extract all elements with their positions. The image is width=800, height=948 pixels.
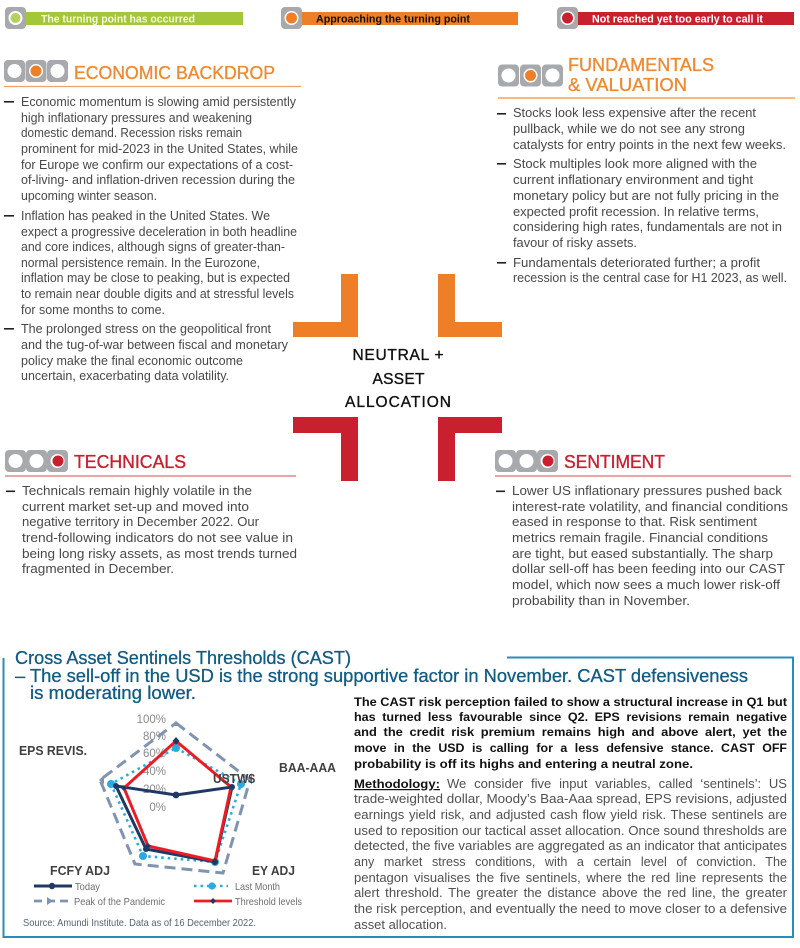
chart legend: Today xyxy=(75,881,101,893)
text block: technicals bullets xyxy=(6,483,297,576)
axis labels: 20% xyxy=(143,784,166,796)
icon: traffic light amber xyxy=(4,60,68,82)
source note: Source: Amundi Institute. Data as of 16 December 2022. xyxy=(23,917,256,929)
text block: fundamentals bullets: Stocks look less expensive after the recent xyxy=(513,105,756,120)
text block: methodology: We consider five input variables, called ‘sentinels’: US xyxy=(447,777,787,791)
text block: economic backdrop bullets: The prolonged stress on the geopolitical front xyxy=(21,322,272,336)
text block: economic backdrop bullets: inflation may be close to peaking, but is expected xyxy=(21,271,290,285)
text block: sentiment bullets: dollar sell-off has been feeding into our CAST xyxy=(512,561,785,576)
text block: technicals bullets: trend-following indicators do not see value in xyxy=(22,530,293,545)
panel: cross asset sentinels thresholds xyxy=(4,647,793,937)
series: last month xyxy=(107,744,245,866)
heading: fundamentals and valuation: FUNDAMENTALS xyxy=(568,55,714,75)
text block: methodology: pentagon visualises the five sentinels, where the red line represents the xyxy=(354,871,787,885)
text block: CAST risk perception: and the credit risk premium remains high and above alert, yet the xyxy=(354,725,787,739)
text block: technicals bullets: fragmented in December. xyxy=(22,561,174,576)
text block: CAST risk perception: The CAST risk perception failed to show a structural increase in Q1 but xyxy=(354,695,787,709)
text block: CAST risk perception: move in the USD is calling for a less defensive stance. CAST OFF xyxy=(354,741,787,755)
text block: methodology xyxy=(354,777,787,932)
axis names: EY ADJ xyxy=(252,863,295,878)
text block: methodology: Methodology: xyxy=(354,777,440,791)
text block: fundamentals bullets: catalysts for entry points in the next few weeks. xyxy=(513,137,786,152)
heading: fundamentals and valuation: & VALUATION xyxy=(568,75,687,95)
legend item: turning point occurred: The turning point has occurred xyxy=(41,14,195,26)
graphic: central corner brackets xyxy=(293,274,502,481)
chart legend: Peak of the Pandemic xyxy=(74,896,165,908)
axis labels: 60% xyxy=(143,748,166,760)
legend item: approaching turning point: Approaching the turning point xyxy=(316,14,470,26)
text block: sentiment bullets: model, which now sees a much lower risk-off xyxy=(512,577,780,592)
text block: methodology: alert threshold. The greater the distance above the red line, the greater xyxy=(354,886,787,900)
axis names: USTW$ xyxy=(213,771,256,786)
text block: economic backdrop bullets: high inflationary pressures and weakening xyxy=(21,111,252,125)
title: neutral + asset allocation xyxy=(345,347,451,411)
radar chart: CAST pentagon xyxy=(19,714,337,878)
text block: sentiment bullets: interest-rate volatility, and financial conditions xyxy=(512,499,789,514)
text block: economic backdrop bullets: for Europe we confirm our expectations of a cost- xyxy=(21,158,293,172)
icon: traffic light red xyxy=(495,450,558,472)
heading: CAST title: – The sell-off in the USD is the strong supportive factor in November. CAST defensiveness xyxy=(15,665,748,686)
text block: methodology: earnings yield risk, and adjusted cash flow yield risk. These sentinels are xyxy=(354,808,787,822)
text block: methodology: asset allocation. xyxy=(354,918,447,932)
heading: CAST title: is moderating lower. xyxy=(30,682,196,703)
text block: sentiment bullets: Lower US inflationary pressures pushed back xyxy=(512,483,783,498)
text block: economic backdrop bullets: upcoming winter season. xyxy=(21,189,157,203)
legend item: not reached yet xyxy=(557,7,794,29)
axis names: EPS REVIS. xyxy=(19,743,87,758)
icon: traffic light red xyxy=(5,450,68,472)
text block: CAST risk perception xyxy=(354,695,787,771)
text block: economic backdrop bullets xyxy=(4,95,298,383)
text block: fundamentals bullets: current inflationary environment and tight xyxy=(513,172,753,187)
text block: economic backdrop bullets: to remain near double digits and at stressful levels xyxy=(21,287,294,301)
text block: technicals bullets: current market set-up and moved into xyxy=(22,499,249,514)
text block: methodology: detected, the five variables are aggregated as an indicator that anticipates xyxy=(354,839,787,853)
text block: economic backdrop bullets: of-living- and inflation-driven recession during the xyxy=(21,173,295,187)
text block: sentiment bullets: eased in response to that. Risk sentiment xyxy=(512,514,757,529)
chart legend xyxy=(34,881,302,908)
text block: economic backdrop bullets: prominent for mid-2023 in the United States, while xyxy=(21,142,298,156)
text block: CAST risk perception: probability is off its highs and entering a neutral zone. xyxy=(354,757,693,771)
heading: technicals: TECHNICALS xyxy=(74,452,186,472)
legend item: turning point occurred xyxy=(5,7,243,29)
text block: technicals bullets: negative territory in December 2022. Our xyxy=(22,514,260,529)
heading: fundamentals and valuation xyxy=(568,55,714,95)
text block: economic backdrop bullets: for some months to come. xyxy=(21,303,165,317)
text block: methodology: used to reposition our tactical asset allocation. Once sound thresholds are xyxy=(354,824,787,838)
text block: economic backdrop bullets: policy make the final economic outcome xyxy=(21,354,243,368)
text block: fundamentals bullets: expected profit recession. In relative terms, xyxy=(513,204,759,219)
text block: methodology: trade-weighted dollar, Moody’s Baa-Aaa spread, EPS revisions, adjusted xyxy=(354,792,787,806)
text block: economic backdrop bullets: Inflation has peaked in the United States. We xyxy=(21,209,270,223)
legend item: approaching turning point xyxy=(281,7,518,29)
panel: economic backdrop xyxy=(4,60,301,383)
text block: economic backdrop bullets: Economic momentum is slowing amid persistently xyxy=(21,95,297,109)
icon: traffic light amber xyxy=(498,64,563,86)
panel: sentiment xyxy=(495,450,791,608)
text block: economic backdrop bullets: domestic demand. Recession risks remain xyxy=(21,126,242,140)
text block: methodology: the risk perception, and eventually the need to move closer to a defensive xyxy=(354,902,787,916)
chart legend: Last Month xyxy=(235,881,280,893)
text block: fundamentals bullets: Stock multiples look more aligned with the xyxy=(513,156,757,171)
axis names: BAA-AAA xyxy=(279,760,337,775)
title: neutral + asset allocation: NEUTRAL + xyxy=(352,347,444,364)
title: neutral + asset allocation: ALLOCATION xyxy=(345,394,451,411)
text block: CAST risk perception: has turned less favourable since Q2. EPS revisions remain negative xyxy=(354,710,787,724)
text block: sentiment bullets: are tight, but eased substantially. The sharp xyxy=(512,546,773,561)
text block: economic backdrop bullets: uncertain, exacerbating data volatility. xyxy=(21,369,229,383)
text block: economic backdrop bullets: normal persistence remain. In the Eurozone, xyxy=(21,256,260,270)
text block: fundamentals bullets: considering high rates, fundamentals are not in xyxy=(513,219,782,234)
axis labels: 40% xyxy=(143,766,166,778)
panel: fundamentals and valuation xyxy=(497,55,795,285)
legend item: not reached yet: Not reached yet too early to call it xyxy=(592,14,763,26)
axis names xyxy=(19,743,337,878)
heading: CAST title xyxy=(15,647,748,703)
text block: fundamentals bullets: recession is the central case for H1 2023, as well. xyxy=(513,270,787,285)
text block: fundamentals bullets: favour of risky assets. xyxy=(513,235,637,250)
text block: fundamentals bullets xyxy=(497,105,787,285)
text block: economic backdrop bullets: expect a progressive deceleration in both headline xyxy=(21,225,297,239)
text block: technicals bullets: Technicals remain highly volatile in the xyxy=(22,483,252,498)
text block: sentiment bullets: probability than in November. xyxy=(512,593,690,608)
chart legend: Threshold levels xyxy=(235,896,302,908)
heading: sentiment: SENTIMENT xyxy=(564,452,665,472)
legend: traffic light key xyxy=(5,7,794,29)
text block: sentiment bullets xyxy=(496,483,789,608)
text block: fundamentals bullets: pullback, while we do not see any strong xyxy=(513,121,745,136)
axis labels: 0% xyxy=(149,802,166,814)
series: threshold levels xyxy=(121,737,234,864)
heading: CAST title: Cross Asset Sentinels Thresholds (CAST) xyxy=(15,647,351,668)
text block: economic backdrop bullets: and the tug-of-war between fiscal and monetary xyxy=(21,338,289,352)
text block: fundamentals bullets: Fundamentals deteriorated further; a profit xyxy=(513,255,760,270)
series: today xyxy=(113,783,235,865)
axis labels xyxy=(137,714,166,814)
panel: technicals xyxy=(5,450,297,576)
axis labels: 100% xyxy=(137,714,166,726)
heading: economic backdrop: ECONOMIC BACKDROP xyxy=(74,63,275,83)
text block: methodology: any market stress conditions, with a certain level of conviction. The xyxy=(354,855,787,869)
series: peak of the pandemic xyxy=(99,721,250,873)
text block: technicals bullets: being long risky assets, as most trends turned xyxy=(22,546,297,561)
text block: sentiment bullets: metrics remain fragile. Financial conditions xyxy=(512,530,769,545)
text block: economic backdrop bullets: and core indices, although signs of greater-than- xyxy=(21,240,285,254)
axis labels: 80% xyxy=(143,731,166,743)
axis names: FCFY ADJ xyxy=(50,863,110,878)
text block: fundamentals bullets: monetary policy but are not fully pricing in the xyxy=(513,188,779,203)
title: neutral + asset allocation: ASSET xyxy=(372,371,425,388)
